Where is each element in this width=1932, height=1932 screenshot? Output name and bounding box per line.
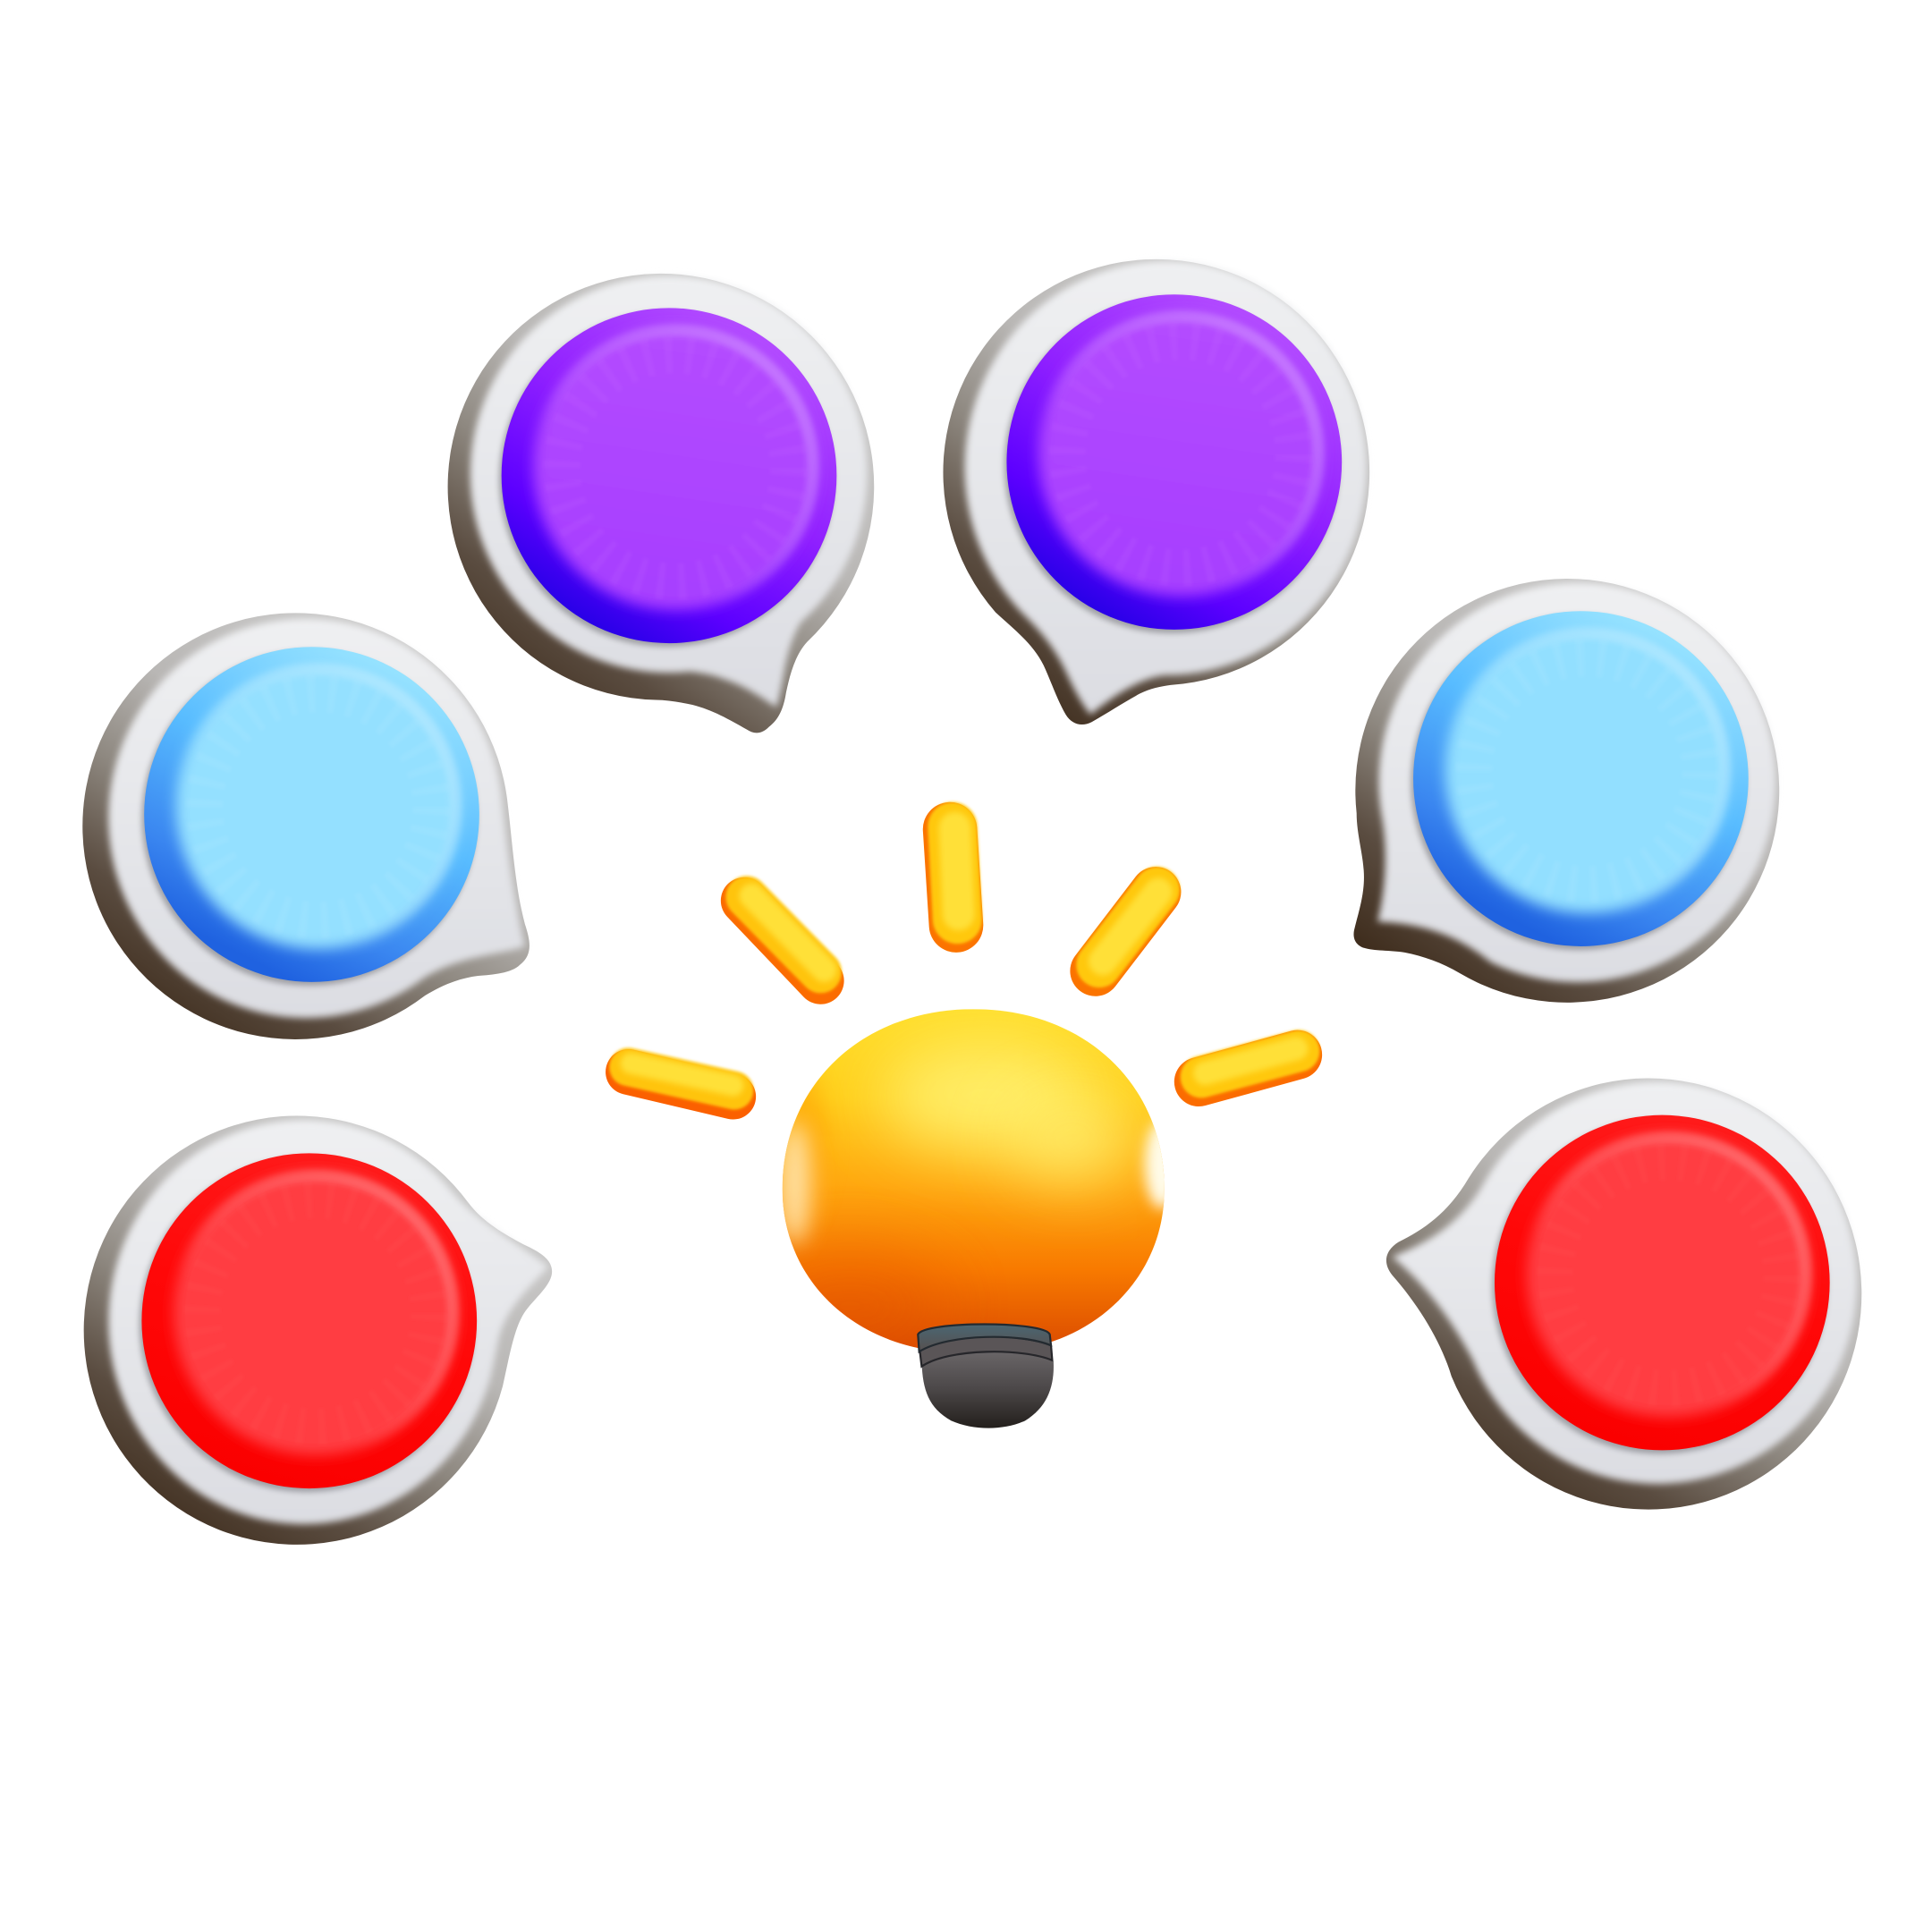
disc [141,647,479,986]
bubble body [1353,579,1779,1003]
speech bubble: red left [84,1115,552,1545]
light bulb [782,1009,1165,1428]
ray: top [950,826,959,926]
speech bubble: blue right [1353,579,1779,1003]
light rays [629,826,1299,1097]
speech bubble: purple top right [943,259,1369,724]
speech bubble: blue left [82,613,530,1039]
bubble body [943,259,1369,724]
bubble face [1393,1082,1857,1484]
bubble body [448,274,874,733]
bubble body [1386,1078,1861,1510]
speech bubble: purple top left [448,274,874,733]
ray: upper right [1096,890,1158,971]
bubble face [1377,583,1775,982]
disc [1004,294,1342,633]
bubble face [108,1120,548,1524]
bubble face [470,275,867,708]
bubble body [82,613,530,1039]
screw base [918,1325,1054,1428]
disc [499,308,836,647]
illustration: light bulb surrounded by six speech bubbles [82,259,1862,1545]
ray: right [1199,1048,1299,1081]
bubble body [84,1115,552,1545]
disc [1411,611,1749,950]
disc [140,1153,477,1492]
bubble face [965,261,1367,715]
bulb globe [782,1009,1165,1348]
bubble face [108,619,525,1018]
ray: upper left [744,895,825,981]
ray: left [629,1063,734,1097]
disc [1492,1115,1830,1454]
speech bubble: red right [1386,1078,1861,1510]
